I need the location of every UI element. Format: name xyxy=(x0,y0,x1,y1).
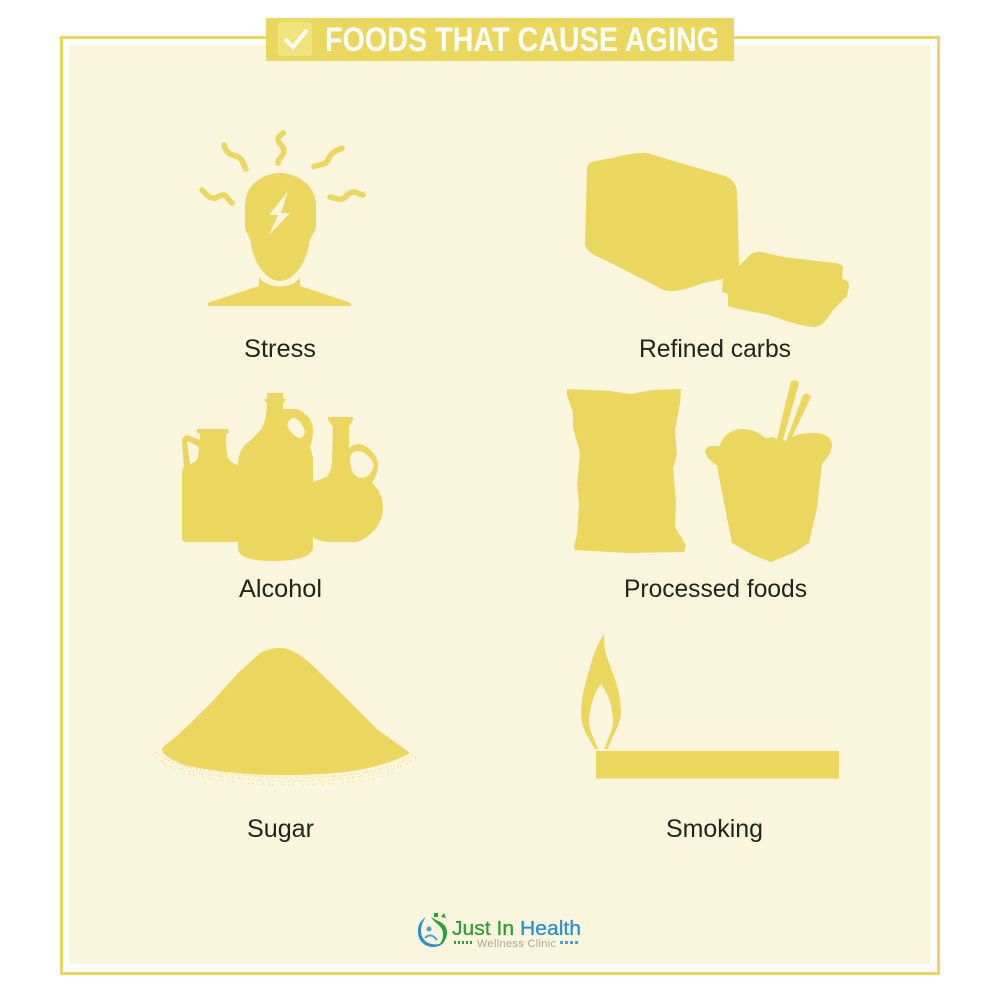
label: stress: Stress xyxy=(244,335,316,363)
icon: cigarette and flame xyxy=(581,634,839,778)
label: sugar: Sugar xyxy=(247,815,314,843)
logo dots xyxy=(454,941,580,944)
logo tagline: Wellness Clinic xyxy=(477,938,556,950)
logo: Just In Health xyxy=(418,913,581,950)
label: refined carbs: Refined carbs xyxy=(639,335,791,363)
icon: takeout box with chopsticks xyxy=(705,380,832,562)
icon: stressed head xyxy=(202,133,363,306)
title text: FOODS THAT CAUSE AGING xyxy=(325,21,719,59)
label: alcohol: Alcohol xyxy=(239,575,322,603)
label: processed foods: Processed foods xyxy=(624,575,807,603)
panel: cream background xyxy=(69,45,930,964)
logo name: Just In Health xyxy=(452,918,581,940)
icon: sugar pile xyxy=(153,648,417,785)
icon: alcohol jugs xyxy=(182,393,383,561)
label: smoking: Smoking xyxy=(666,815,763,843)
logo mark xyxy=(418,913,447,947)
title banner xyxy=(266,18,734,61)
icon: check box xyxy=(278,22,312,56)
icon: chips bag xyxy=(567,389,686,553)
icon: bread loaf and slices xyxy=(585,153,849,327)
